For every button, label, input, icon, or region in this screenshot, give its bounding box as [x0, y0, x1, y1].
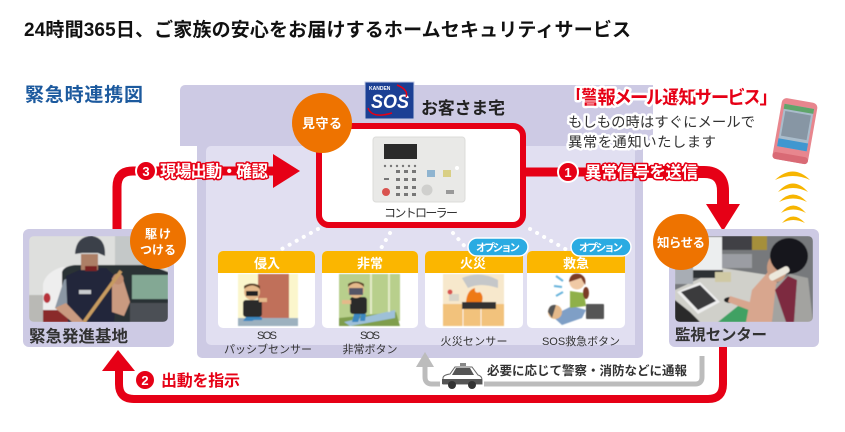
- badge: notify: [653, 214, 709, 270]
- label: passive sensor: パッシブセンサー: [224, 342, 312, 356]
- card: emergency: [322, 251, 418, 328]
- card: fire: [425, 238, 528, 328]
- badge: watch over: [292, 93, 352, 153]
- logo: Kanden SOS: KANDEN: [369, 86, 391, 92]
- logo: Kanden SOS: [365, 82, 414, 119]
- label: fire sensor: 火災センサー: [440, 335, 508, 348]
- illustration: burglar at window: [339, 274, 400, 326]
- arrow 3: on-site dispatch and confirmation: 3: [142, 164, 150, 179]
- badge: rush to scene: [130, 213, 186, 269]
- photo: security guard: [29, 236, 168, 322]
- logo: Kanden SOS: SOS: [371, 92, 409, 113]
- icon: police car: [440, 360, 484, 390]
- badge: rush to scene: つける: [140, 243, 176, 257]
- callout: alert mail service: もしもの時はすぐにメールで: [568, 114, 755, 131]
- label: passive sensor: SOS: [257, 330, 277, 342]
- arrow 3: on-site dispatch and confirmation: 現場出動・確認: [160, 162, 268, 181]
- arrow 2: instruct dispatch: [102, 345, 723, 399]
- illustration: burglar at door: [238, 274, 298, 326]
- heading: emergency coordination diagram: 緊急時連携図: [25, 83, 143, 106]
- callout: alert mail service: 異常を通知いたします: [568, 134, 716, 151]
- badge: notify: 知らせる: [657, 235, 705, 250]
- callout: alert mail service: [565, 87, 778, 151]
- label: emergency button: [342, 330, 398, 356]
- controller label: コントローラー: [384, 206, 458, 220]
- label: emergency dispatch base: 緊急発進基地: [29, 326, 128, 346]
- dotted connector lines: [280, 229, 567, 250]
- label: emergency button: 非常ボタン: [342, 343, 398, 356]
- title: 24時間365日、ご家族の安心をお届けするホームセキュリティサービス: [24, 18, 631, 41]
- controller box with red frame: [319, 126, 523, 225]
- label: SOS emergency button: SOS救急ボタン: [542, 334, 620, 348]
- arrow: notify police and fire: 必要に応じて警察・消防などに通報: [487, 363, 687, 378]
- arrow 2: instruct dispatch: 出動を指示: [161, 372, 240, 390]
- arrow 2: instruct dispatch: 2: [141, 373, 149, 388]
- arrow 1: send alarm signal: 異常信号を送信: [585, 163, 698, 182]
- card: intrusion: [218, 251, 315, 328]
- card: emergency: 非常: [357, 256, 383, 271]
- panel: monitoring center: [669, 229, 819, 347]
- arrow 1: send alarm signal: 1: [564, 165, 572, 180]
- heading: customer home: お客さま宅: [421, 98, 505, 118]
- illustration: woman helping collapsed man: [548, 274, 604, 325]
- badge: option: オプション: [579, 242, 623, 254]
- controller device: [373, 137, 465, 202]
- card: medical emergency: [527, 238, 631, 328]
- card: medical emergency: 救急: [563, 256, 589, 271]
- arrow 3: on-site dispatch and confirmation: [117, 154, 300, 234]
- icon: wireless signal waves: [775, 172, 810, 223]
- card: intrusion: 侵入: [254, 256, 280, 271]
- label: monitoring center: 監視センター: [675, 326, 767, 344]
- arrow 1: send alarm signal: [525, 161, 740, 231]
- panel: customer home building: [180, 85, 653, 358]
- icon: smartphone: [772, 97, 818, 165]
- badge: watch over: 見守る: [302, 116, 342, 131]
- arrow: notify police and fire: [416, 352, 702, 390]
- badge: option: オプション: [476, 242, 520, 254]
- panel: emergency dispatch base: [23, 229, 174, 347]
- label: passive sensor: [224, 330, 312, 356]
- card: fire: 火災: [460, 256, 486, 271]
- badge: rush to scene: 駆け: [145, 227, 171, 241]
- label: emergency button: SOS: [360, 330, 380, 342]
- photo: operator on the phone: [675, 236, 813, 322]
- emergency coordination diagram: [23, 82, 819, 399]
- callout: alert mail service: 「警報メール通知サービス」: [565, 87, 778, 108]
- illustration: kitchen fire: [443, 274, 504, 326]
